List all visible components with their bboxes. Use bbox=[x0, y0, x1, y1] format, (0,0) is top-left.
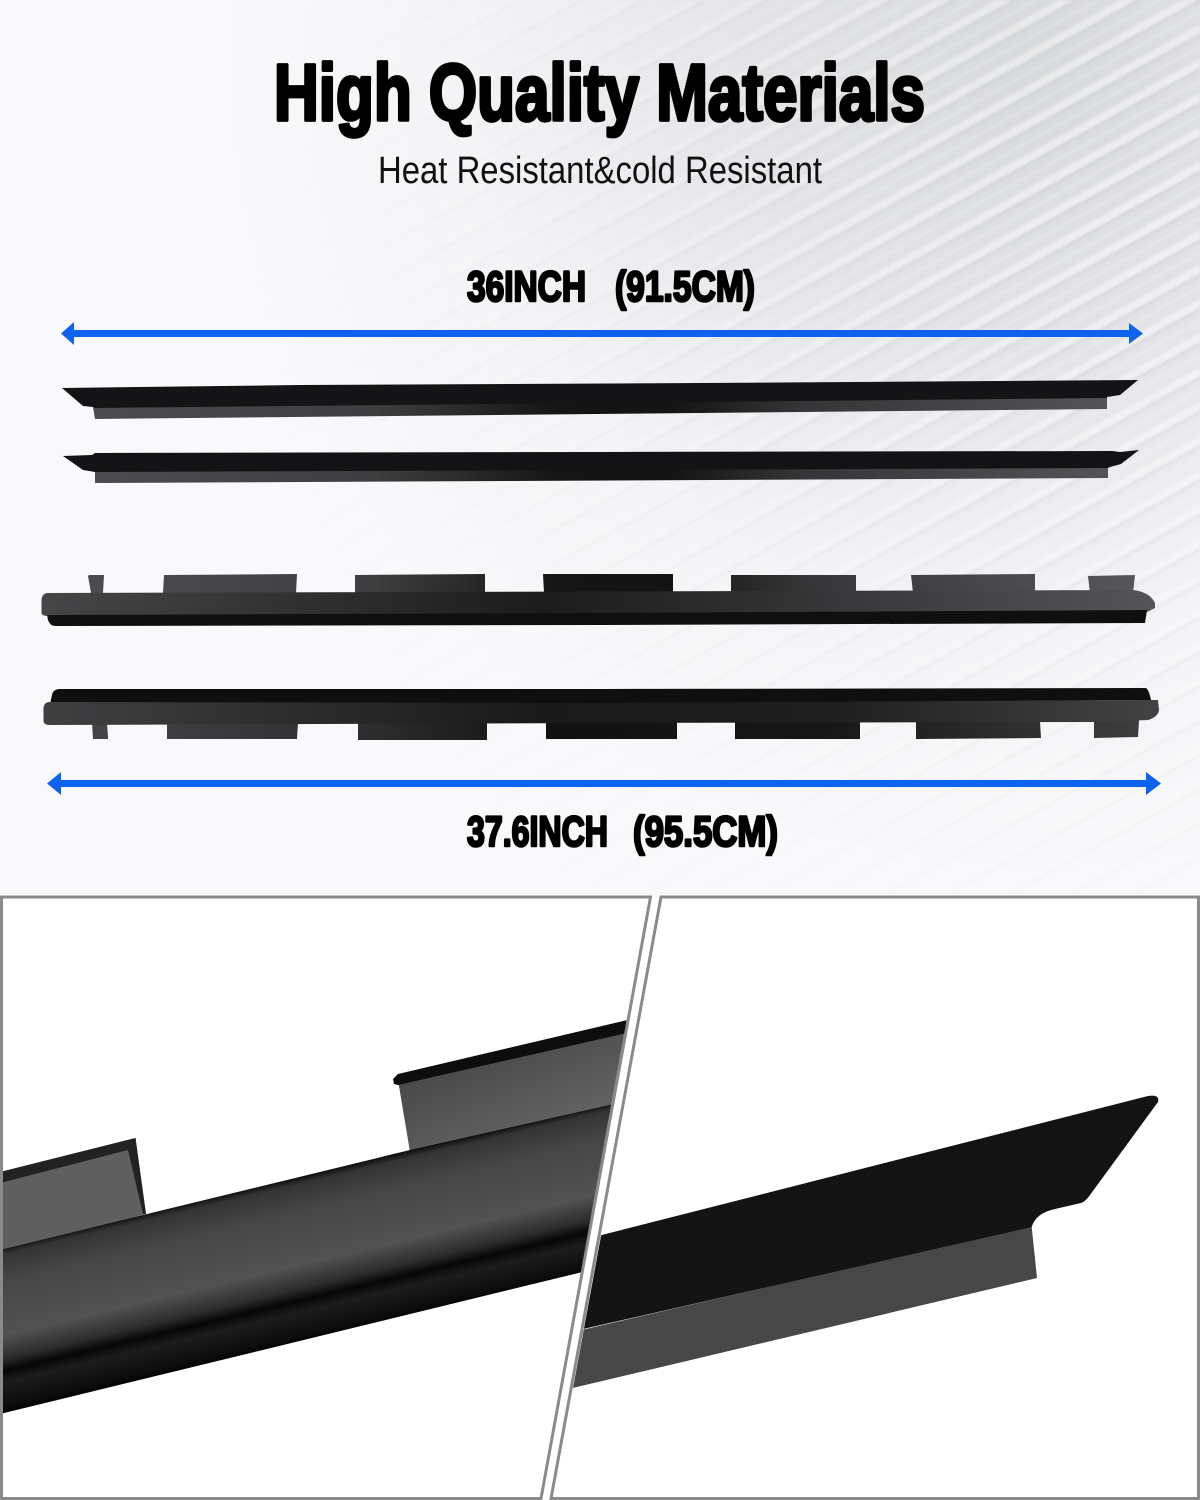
dimension label: bottom strips length: 37.6INCH bbox=[467, 808, 608, 856]
title: High Quality Materials bbox=[274, 48, 925, 137]
panel: close-up of inner strip with clips bbox=[0, 897, 650, 1498]
product: inner strip 3 with clips bbox=[41, 574, 1155, 626]
tube body bbox=[43, 700, 1159, 725]
background: light gray diagonal streaks bbox=[272, 0, 1200, 895]
panel: close-up of outer strip end bbox=[551, 897, 1198, 1498]
dimension label: top strips length: (91.5CM) bbox=[615, 263, 755, 311]
close-up clip tab left bbox=[0, 1138, 146, 1252]
arrow: bottom 37.6 inch span bbox=[47, 772, 1161, 795]
subtitle: Heat Resistant&cold Resistant bbox=[378, 150, 822, 192]
clip tabs row bbox=[88, 574, 1135, 593]
dimension label: top strips length: 36INCH bbox=[467, 263, 586, 311]
close-up outer strip gray lip bbox=[560, 1226, 1037, 1391]
arrow: top 36 inch span bbox=[61, 322, 1143, 345]
clip tabs row bbox=[92, 720, 1139, 740]
product: inner strip 4 with clips bbox=[43, 688, 1159, 740]
dark upper lip bbox=[50, 688, 1151, 704]
dimension label: bottom strips length: (95.5CM) bbox=[633, 808, 778, 856]
dark lower lip bbox=[47, 610, 1147, 626]
tube body bbox=[41, 590, 1155, 616]
close-up tube body bbox=[0, 1098, 640, 1414]
dimension label: top strips length bbox=[467, 263, 755, 311]
close-up clip tab right bbox=[393, 1017, 640, 1152]
product: outer strip 2 bbox=[63, 450, 1139, 483]
dimension label: bottom strips length bbox=[467, 808, 778, 856]
product: outer strip 1 bbox=[62, 380, 1138, 419]
close-up outer strip black face bbox=[570, 1096, 1158, 1332]
